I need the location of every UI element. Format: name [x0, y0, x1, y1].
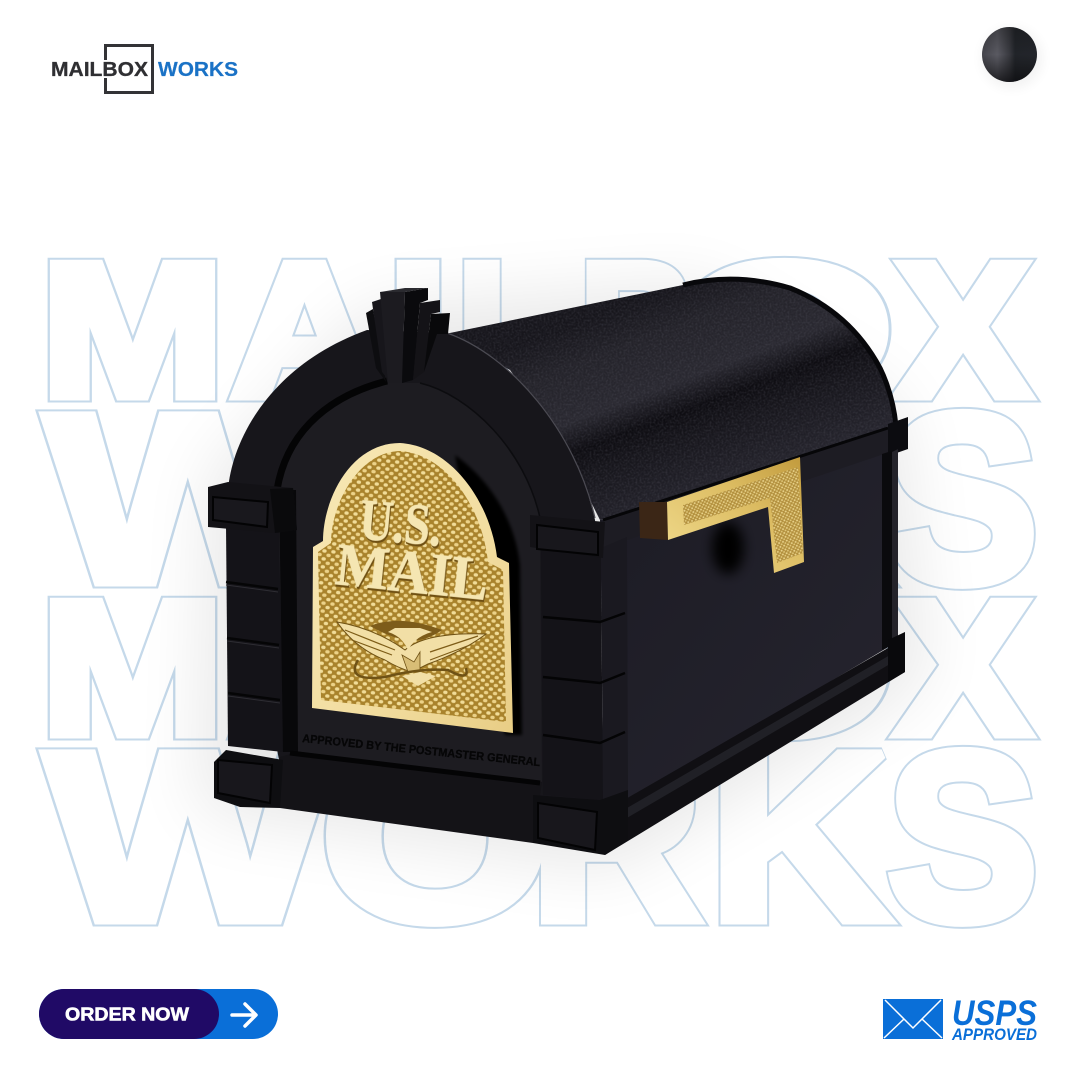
background outlined words: MAILBOX WORKS: O: [676, 224, 893, 436]
usps approved badge: [883, 994, 1037, 1044]
background outlined words: MAILBOX WORKS: O: [676, 562, 893, 774]
background outlined words: MAILBOX WORKS: I: [388, 224, 448, 436]
flag shadow: [712, 522, 744, 574]
background outlined words: MAILBOX WORKS: L: [457, 562, 567, 774]
background outlined words: MAILBOX WORKS: M: [41, 224, 224, 436]
background outlined words: MAILBOX WORKS: O: [676, 562, 893, 774]
logo: MAILBOX: [51, 58, 148, 81]
arch rim highlight: [447, 333, 595, 518]
background outlined words: MAILBOX WORKS: O: [320, 364, 551, 632]
plate eagle emblem: [337, 621, 486, 686]
order now button: [39, 989, 278, 1039]
embossed text on door: APPROVED BY THE POSTMASTER GENERAL: [302, 733, 541, 769]
background outlined words: MAILBOX WORKS: L: [457, 562, 567, 774]
background outlined words: MAILBOX WORKS: I: [388, 562, 448, 774]
left capital block: [208, 482, 297, 533]
background outlined words: MAILBOX WORKS: B: [580, 224, 696, 436]
background outlined words: MAILBOX WORKS: W: [46, 364, 331, 632]
front arch body: [228, 330, 605, 800]
rear rim of roof: [683, 279, 896, 426]
background outlined words: MAILBOX WORKS: K: [709, 702, 890, 970]
logo: WORKS: [158, 58, 238, 81]
inner arch shadow: [277, 381, 387, 490]
gold flag: [639, 457, 804, 573]
plate shadow: [455, 455, 522, 735]
background outlined words: MAILBOX WORKS: R: [530, 364, 702, 632]
mailbox product illustration: [208, 279, 908, 855]
roof of mailbox: [445, 279, 896, 520]
base groove: [290, 753, 540, 783]
rear end cap and edge: [882, 417, 908, 650]
left base block: [214, 750, 283, 808]
usps wordmark: USPS: [952, 994, 1037, 1033]
front inner panel: [277, 383, 542, 782]
background outlined words: MAILBOX WORKS: [41, 224, 1038, 970]
background outlined words: MAILBOX WORKS: L: [457, 224, 567, 436]
background outlined words: MAILBOX WORKS: L: [457, 224, 567, 436]
right column bricks: [541, 537, 628, 805]
background outlined words: MAILBOX WORKS: O: [676, 224, 893, 436]
plate lettering U.S. MAIL: MAIL: [333, 531, 492, 613]
background outlined words: MAILBOX WORKS: M: [41, 562, 224, 774]
side panel: [600, 440, 892, 815]
background outlined words: MAILBOX WORKS: O: [320, 702, 551, 970]
button label: ORDER NOW: [65, 1004, 190, 1024]
colour swatch: black sphere: [982, 27, 1042, 88]
plate lettering U.S. MAIL: U.S.: [357, 487, 444, 559]
arrow icon: [232, 1004, 256, 1026]
brass plate: [312, 443, 513, 733]
plate lettering U.S. MAIL: [333, 487, 492, 613]
background outlined words: MAILBOX WORKS: M: [41, 224, 224, 436]
finial ornament: [366, 288, 450, 383]
background outlined words: MAILBOX WORKS: X: [896, 562, 1030, 774]
background outlined words: MAILBOX WORKS: R: [530, 702, 702, 970]
background outlined words: MAILBOX WORKS: A: [231, 224, 378, 436]
left column bricks: [226, 490, 298, 752]
background outlined words: MAILBOX WORKS: K: [709, 364, 890, 632]
base on side: [603, 632, 905, 855]
background outlined words: MAILBOX WORKS: A: [231, 562, 378, 774]
background outlined words: MAILBOX WORKS: X: [896, 224, 1030, 436]
background outlined words: MAILBOX WORKS: W: [46, 702, 331, 970]
background outlined words: MAILBOX WORKS: I: [388, 224, 448, 436]
background outlined words: MAILBOX WORKS: A: [231, 224, 378, 436]
background outlined words: MAILBOX WORKS: R: [530, 702, 702, 970]
background outlined words: MAILBOX WORKS: X: [896, 224, 1030, 436]
right base block: [533, 790, 628, 855]
background outlined words: MAILBOX WORKS: B: [580, 562, 696, 774]
front base plinth: [280, 752, 542, 843]
background outlined words: MAILBOX WORKS: X: [896, 562, 1030, 774]
background outlined words: MAILBOX WORKS: S: [887, 702, 1038, 970]
soft shadow behind mailbox: [200, 285, 925, 870]
background outlined words: MAILBOX WORKS: W: [46, 364, 331, 632]
background outlined words: MAILBOX WORKS: B: [580, 224, 696, 436]
background outlined words: MAILBOX WORKS: O: [320, 364, 551, 632]
logo: [51, 46, 238, 92]
background outlined words: MAILBOX WORKS: K: [709, 702, 890, 970]
background outlined words: MAILBOX WORKS: S: [887, 364, 1038, 632]
background outlined words: MAILBOX WORKS: W: [46, 702, 331, 970]
background outlined words: MAILBOX WORKS: R: [530, 364, 702, 632]
background outlined words: MAILBOX WORKS: S: [887, 364, 1038, 632]
right capital block: [530, 515, 605, 558]
roof seam band: [603, 428, 890, 548]
background outlined words: MAILBOX WORKS: S: [887, 702, 1038, 970]
background outlined words: MAILBOX WORKS: I: [388, 562, 448, 774]
envelope icon: [883, 999, 943, 1039]
background outlined words: MAILBOX WORKS: O: [320, 702, 551, 970]
background outlined words: MAILBOX WORKS: A: [231, 562, 378, 774]
background outlined words: MAILBOX WORKS: B: [580, 562, 696, 774]
approved wordmark: APPROVED: [951, 1026, 1037, 1044]
background outlined words: MAILBOX WORKS: K: [709, 364, 890, 632]
background outlined words: MAILBOX WORKS: M: [41, 562, 224, 774]
